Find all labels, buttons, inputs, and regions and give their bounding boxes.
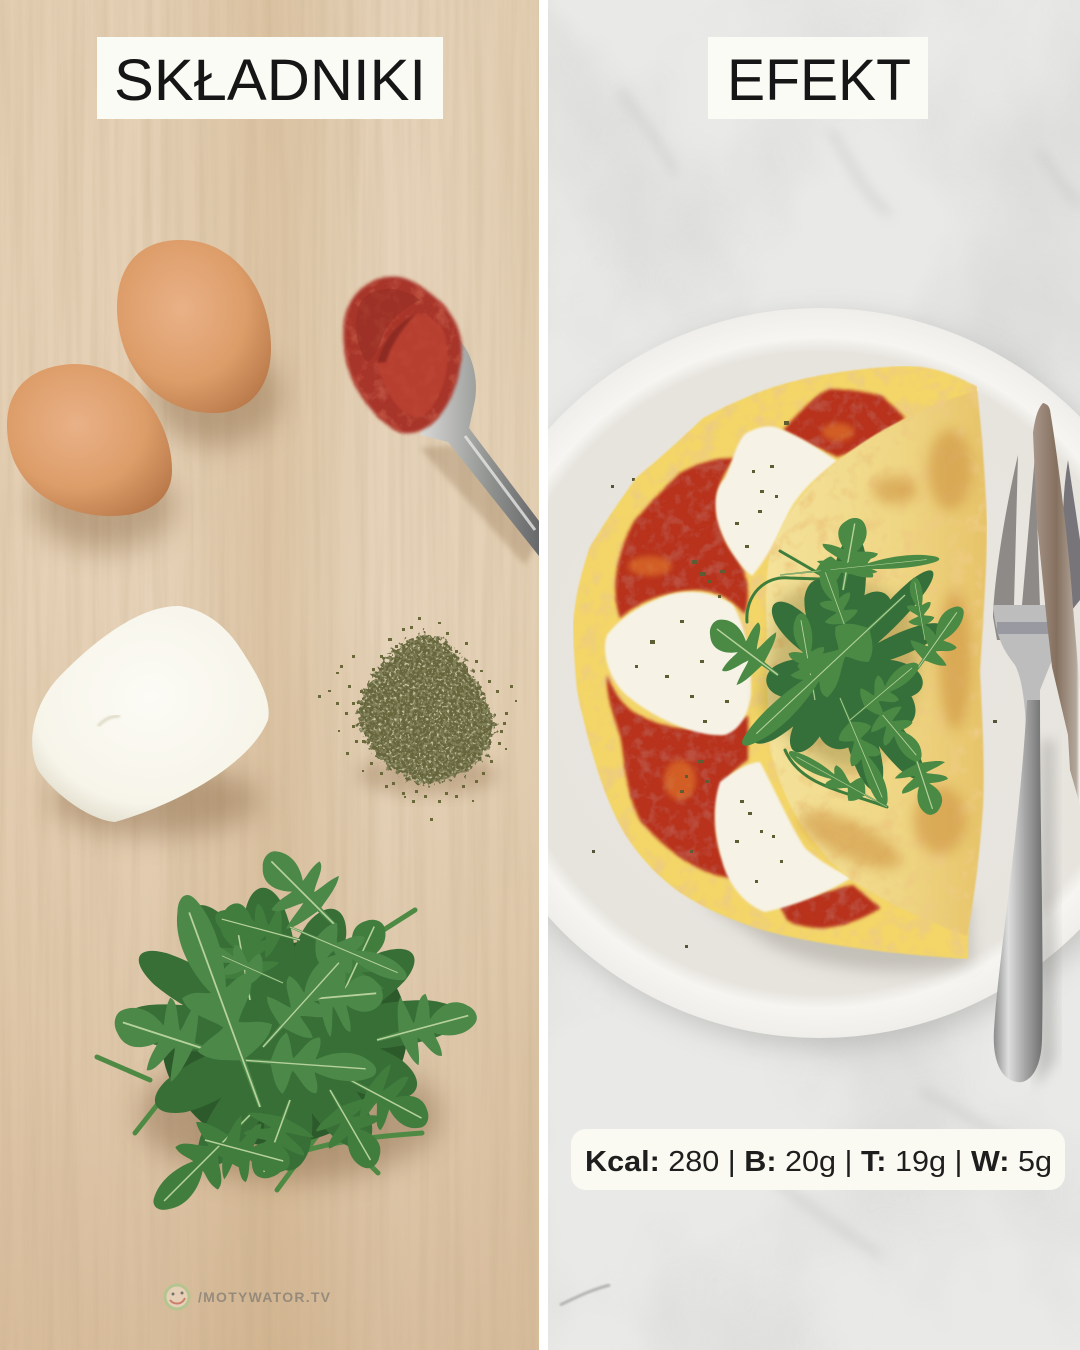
sauce highlights bbox=[628, 423, 854, 800]
icon: eggs bbox=[7, 240, 281, 551]
fork: tines bbox=[993, 455, 1054, 640]
arugula: back leaves bbox=[133, 892, 443, 1232]
illustration: plate with omelette bbox=[548, 306, 1080, 1084]
arugula: stems bbox=[97, 910, 422, 1190]
icon: dried oregano bbox=[318, 617, 517, 821]
watermark: motywator.tv: /MOTYWATOR.TV bbox=[198, 1289, 331, 1305]
arugula: leaves bbox=[692, 513, 979, 822]
cutlery: knife bbox=[1033, 403, 1080, 805]
nutrition label bbox=[571, 1129, 1065, 1190]
arugula: dark underlayer bbox=[162, 940, 408, 1145]
icon: arugula pile bbox=[97, 830, 485, 1232]
icon: mozzarella bbox=[32, 606, 269, 836]
arugula: blades bbox=[746, 534, 947, 795]
folded half bbox=[766, 391, 987, 936]
nutrition label: Kcal: 280 | B: 20g | T: 19g | W: 5g bbox=[585, 1146, 1052, 1178]
fork: head bbox=[993, 605, 1052, 750]
heading: efekt bbox=[708, 37, 928, 119]
tomato sauce bbox=[607, 389, 905, 928]
melted mozzarella bbox=[605, 426, 851, 912]
icon: spoon with tomato paste bbox=[343, 277, 539, 565]
heading: składniki bbox=[97, 37, 443, 119]
arugula on top bbox=[692, 513, 979, 822]
heading: składniki: SKŁADNIKI bbox=[114, 48, 426, 113]
plate bbox=[455, 308, 1080, 1047]
panel: efekt (result) bbox=[455, 0, 1080, 1350]
arugula: outer blades bbox=[120, 884, 464, 1177]
browned omelette patches bbox=[793, 430, 972, 880]
fork: handle bbox=[994, 700, 1043, 1082]
panel: składniki (ingredients) bbox=[0, 0, 539, 1350]
arugula: curved stems bbox=[747, 551, 887, 807]
watermark: motywator.tv bbox=[165, 1285, 331, 1309]
arugula: top leaves bbox=[102, 830, 485, 1121]
heading: efekt: EFEKT bbox=[727, 48, 911, 113]
herb specks bbox=[635, 421, 789, 883]
omelette bbox=[573, 366, 987, 972]
cutlery: fork bbox=[993, 455, 1080, 1088]
